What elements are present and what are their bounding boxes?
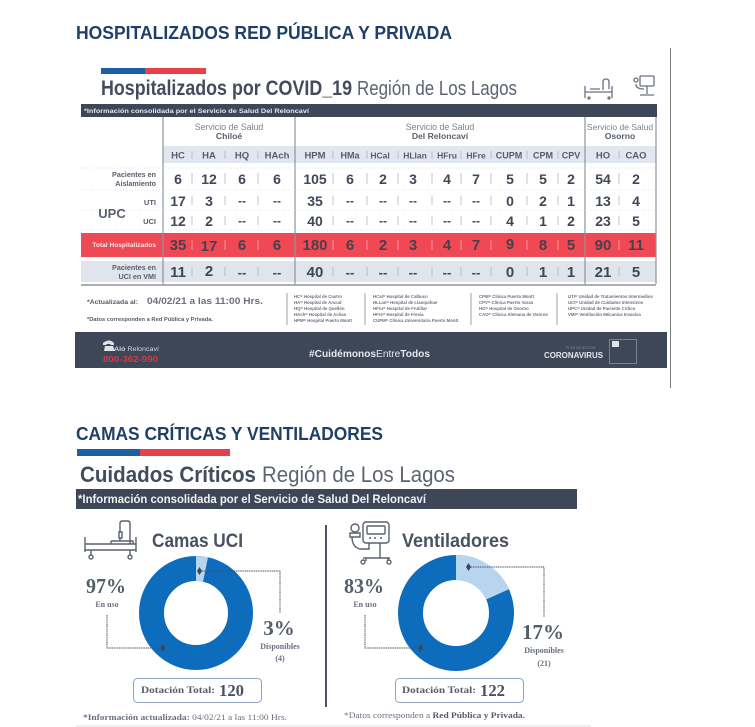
glossary: HPM= Hospital Puerto Montt <box>294 318 352 323</box>
panel title: Región de Los Lagos <box>262 462 455 487</box>
callout: 17% disponibles: Disponibles <box>524 646 564 655</box>
table header band <box>163 146 656 163</box>
row labels: UCI <box>143 217 156 226</box>
row labels <box>92 170 157 281</box>
row: total hospitalizados: 9 <box>506 236 514 253</box>
total row band <box>81 233 656 257</box>
row labels: Total Hospitalizados <box>92 242 156 249</box>
dotacion total box: camas <box>134 678 262 702</box>
row: pacientes en aislamiento: 4 <box>443 171 451 187</box>
panel title accent bar <box>77 449 230 456</box>
row labels: UCI en VMI <box>118 272 156 281</box>
row: total hospitalizados: 6 <box>346 237 354 254</box>
row: pacientes en VMI: -- <box>346 265 354 280</box>
row: pacientes en VMI: 21 <box>595 264 611 281</box>
update note: *Datos corresponden a Red Pública y Privada. <box>87 317 214 323</box>
footer band: PLAN DE ACCIÓN <box>566 345 596 350</box>
page divider line <box>670 48 671 388</box>
dotacion total box: ventiladores <box>396 678 524 702</box>
row: UTI: 35 <box>307 193 323 209</box>
row: UTI: -- <box>409 194 417 208</box>
donut chart: ventiladores <box>410 555 509 658</box>
column headers: HQ <box>235 150 249 162</box>
row: UCI: 23 <box>595 213 611 229</box>
column headers: CPV <box>562 150 580 160</box>
callout: 97% en uso: En uso <box>95 600 119 609</box>
callout: 83% en uso: 83% <box>344 574 384 598</box>
row: UCI: -- <box>443 214 451 228</box>
row labels: UTI <box>144 198 156 207</box>
column headers: HMa <box>340 150 360 160</box>
callout: 17% disponibles: 17% <box>522 620 564 644</box>
row: total hospitalizados: 2 <box>379 237 387 254</box>
row: UTI: -- <box>472 194 480 208</box>
heading: ventiladores: Ventiladores <box>402 531 509 552</box>
glossary: HA= Hospital de Ancud <box>294 300 342 305</box>
row: UCI: -- <box>346 214 354 228</box>
service headers: Servicio de Salud <box>195 122 263 132</box>
row: pacientes en aislamiento: 6 <box>273 171 281 187</box>
column headers: CPM <box>533 150 553 160</box>
column headers: CAO <box>625 150 647 162</box>
column headers: HC <box>171 150 185 162</box>
row labels: UPC <box>98 206 126 221</box>
panel title <box>80 462 455 487</box>
service headers: Chiloé <box>216 131 242 141</box>
service headers: Del Reloncaví <box>412 131 469 141</box>
row: total hospitalizados: 6 <box>273 237 281 254</box>
row labels: Pacientes en <box>112 170 156 179</box>
row: UCI: -- <box>409 214 417 228</box>
row: UTI: -- <box>346 194 354 208</box>
glossary: CPV= Clínica Puerto Varas <box>479 300 534 305</box>
row: pacientes en aislamiento: 6 <box>346 171 354 187</box>
panel title: Hospitalizados por COVID_19 <box>101 77 352 100</box>
footer band: CORONAVIRUS <box>544 351 604 360</box>
row: pacientes en aislamiento: 12 <box>201 171 217 187</box>
row: UTI: -- <box>443 194 451 208</box>
row: total hospitalizados: 17 <box>201 238 217 255</box>
row: pacientes en VMI: -- <box>273 265 281 280</box>
row: pacientes en VMI: -- <box>379 265 387 280</box>
row: pacientes en VMI: -- <box>409 265 417 280</box>
row: total hospitalizados <box>170 236 644 255</box>
column headers: HPM <box>304 150 326 162</box>
row: pacientes en VMI: -- <box>443 265 451 280</box>
column headers: HFru <box>437 150 457 160</box>
heading: hospitalizados: HOSPITALIZADOS RED PÚBLICA Y PRIVADA <box>76 22 452 43</box>
glossary: HFre= Hospital de Fresia <box>373 312 424 317</box>
glossary <box>287 293 653 325</box>
row: pacientes en VMI: 40 <box>307 264 323 281</box>
row: total hospitalizados: 180 <box>302 237 328 254</box>
row: UTI: 3 <box>205 193 213 209</box>
row: pacientes en VMI: 1 <box>539 264 547 281</box>
update note: 04/02/21 a las 11:00 Hrs. <box>147 296 263 307</box>
glossary: CAO= Clínica Alemana de Osorno <box>479 312 548 317</box>
row: UTI: 13 <box>595 193 611 209</box>
column headers: CUPM <box>496 150 522 160</box>
dotacion total box: ventiladores: Dotación Total: <box>402 686 476 696</box>
row: total hospitalizados: 35 <box>170 237 186 254</box>
row: UCI: -- <box>273 214 281 228</box>
glossary: HO= Hospital de Osorno <box>479 306 529 311</box>
row: pacientes en aislamiento: 5 <box>506 171 514 187</box>
glossary: HQ= Hospital de Quellón <box>294 306 345 311</box>
service headers: Servicio de Salud <box>406 122 474 132</box>
row: UCI: 2 <box>567 213 575 229</box>
glossary: CUPM= Clínica Universitaria Puerto Montt <box>373 318 459 323</box>
row: pacientes en VMI: 1 <box>567 264 575 281</box>
glossary: HLLan= Hospital de Llanquihue <box>373 300 438 305</box>
donut chart: camas UCI <box>152 556 240 658</box>
row: UCI: 1 <box>539 213 547 229</box>
glossary: HC= Hospital de Castro <box>294 294 342 299</box>
callout: 17% disponibles <box>466 563 564 668</box>
row: total hospitalizados: 8 <box>539 237 547 254</box>
row: UTI <box>170 193 640 209</box>
row: pacientes en VMI: 0 <box>506 264 514 281</box>
row labels: Pacientes en <box>112 263 156 272</box>
dotacion total box: ventiladores: 122 <box>480 681 505 700</box>
icon: hospital bed <box>585 79 612 99</box>
callout: 3% disponibles: 3% <box>263 616 295 640</box>
column headers: HCal <box>370 150 390 160</box>
row: pacientes en aislamiento: 3 <box>409 171 417 187</box>
information bar: *Información consolidada por el Servicio de Salud Del Reloncaví <box>78 494 427 506</box>
row: pacientes en aislamiento: 6 <box>238 171 246 187</box>
icon: ventilator <box>634 76 654 95</box>
VMI row band <box>81 261 656 282</box>
row: UCI: 5 <box>632 213 640 229</box>
row: UCI: 12 <box>170 213 186 229</box>
row: pacientes en aislamiento: 105 <box>303 171 327 187</box>
footer band: #CuidémonosEntreTodos <box>309 349 430 360</box>
note: informacion actualizada: *Información actualizada: 04/02/21 a las 11:00 Hrs. <box>83 712 287 722</box>
heading: camas UCI: Camas UCI <box>152 531 243 552</box>
row: total hospitalizados: 7 <box>472 237 480 254</box>
glossary: HCal= Hospital de Calbuco <box>373 294 428 299</box>
column headers: HA <box>202 150 216 162</box>
row: pacientes en VMI: 11 <box>170 264 186 281</box>
row: pacientes en VMI: -- <box>238 265 246 280</box>
row: pacientes en aislamiento: 6 <box>174 171 182 187</box>
row: pacientes en VMI: 5 <box>632 264 640 281</box>
dotacion total box: camas: 120 <box>219 681 244 700</box>
row: pacientes en VMI <box>170 263 640 281</box>
information bar: *Información consolidada por el Servicio de Salud Del Reloncaví <box>84 108 309 115</box>
row: pacientes en VMI: -- <box>472 265 480 280</box>
service headers: Osorno <box>605 131 635 141</box>
row: UCI: -- <box>472 214 480 228</box>
footer band: Aló Reloncaví <box>114 346 159 353</box>
row: UCI: 4 <box>506 213 514 229</box>
glossary: UPC= Unidad de Paciente Crítico <box>568 306 636 311</box>
column headers: HLlan <box>403 150 427 160</box>
row: pacientes en VMI: 2 <box>205 263 213 280</box>
panel title: Cuidados Críticos <box>80 462 256 487</box>
row: pacientes en aislamiento: 54 <box>595 171 611 187</box>
update note: *Actualizada al: <box>87 299 138 306</box>
column headers: HAch <box>265 150 290 162</box>
callout: 97% en uso: 97% <box>86 574 126 598</box>
callout: 83% en uso: En uso <box>353 600 377 609</box>
footer band: 800-362-990 <box>103 354 158 364</box>
row: UTI: 17 <box>170 193 186 209</box>
callout: 3% disponibles: Disponibles <box>260 642 300 651</box>
row: pacientes en aislamiento: 2 <box>567 171 575 187</box>
bottom edge line <box>76 725 591 727</box>
update note <box>87 296 263 323</box>
row: UTI: 2 <box>539 193 547 209</box>
row: UCI: 40 <box>307 213 323 229</box>
information bar <box>81 104 657 117</box>
note: datos corresponden: *Datos corresponden a Red Pública y Privada. <box>344 710 525 720</box>
glossary: CPM= Clínica Puerto Montt <box>479 294 535 299</box>
dotacion total box: camas: Dotación Total: <box>141 686 215 696</box>
row: pacientes en aislamiento: 7 <box>472 171 480 187</box>
row: total hospitalizados: 3 <box>409 237 417 254</box>
row: UTI: -- <box>238 194 246 208</box>
column headers <box>171 150 647 162</box>
row: UTI: -- <box>273 194 281 208</box>
table grid <box>81 117 656 285</box>
glossary: UCI= Unidad de Cuidados Intensivos <box>568 300 644 305</box>
callout: 97% en uso <box>86 574 166 652</box>
icon: hospital bed <box>85 521 136 559</box>
icon: ventilator <box>350 522 391 564</box>
callout: 83% en uso <box>344 574 423 652</box>
row: UCI: 2 <box>205 213 213 229</box>
row: pacientes en aislamiento: 2 <box>632 171 640 187</box>
panel title accent bar <box>101 68 206 74</box>
callout: 3% disponibles <box>197 567 300 663</box>
row: pacientes en aislamiento: 5 <box>539 171 547 187</box>
glossary: VMI= Ventilación Mécanica Invasiva <box>568 312 641 317</box>
row labels: Aislamiento <box>115 179 157 188</box>
panel title: Región de Los Lagos <box>357 78 517 100</box>
row: pacientes en aislamiento: 2 <box>379 171 387 187</box>
panel: cuidados criticos <box>76 449 577 722</box>
row: total hospitalizados: 4 <box>443 237 452 254</box>
panel: hospitalizados por COVID <box>75 68 667 368</box>
row: total hospitalizados: 90 <box>595 237 611 254</box>
service headers: Servicio de Salud <box>587 122 653 132</box>
callout: 17% disponibles: (21) <box>537 659 551 668</box>
service headers <box>195 122 653 141</box>
row: UCI: -- <box>379 214 387 228</box>
row: UTI: 4 <box>632 193 640 209</box>
glossary: HFru= Hospital de Frutillar <box>373 306 427 311</box>
glossary: HAch= Hospital de Achao <box>294 312 347 317</box>
row: UTI: 0 <box>506 193 514 209</box>
column headers: HO <box>596 150 610 162</box>
glossary: UTI= Unidad de Tratamientos Intermedios <box>568 294 653 299</box>
row: UCI: -- <box>238 214 246 228</box>
information bar <box>76 489 577 509</box>
row: UCI <box>170 213 640 229</box>
row: pacientes en aislamiento <box>174 171 640 187</box>
row: UTI: 1 <box>567 193 575 209</box>
row: total hospitalizados: 6 <box>238 237 246 254</box>
center divider <box>325 525 327 707</box>
row: total hospitalizados: 11 <box>628 237 644 254</box>
row: UTI: -- <box>379 194 387 208</box>
row: total hospitalizados: 5 <box>567 237 575 254</box>
heading: camas criticas: CAMAS CRÍTICAS Y VENTILADORES <box>76 423 383 444</box>
column headers: HFre <box>466 150 486 160</box>
footer band <box>75 332 667 368</box>
callout: 3% disponibles: (4) <box>275 654 285 663</box>
